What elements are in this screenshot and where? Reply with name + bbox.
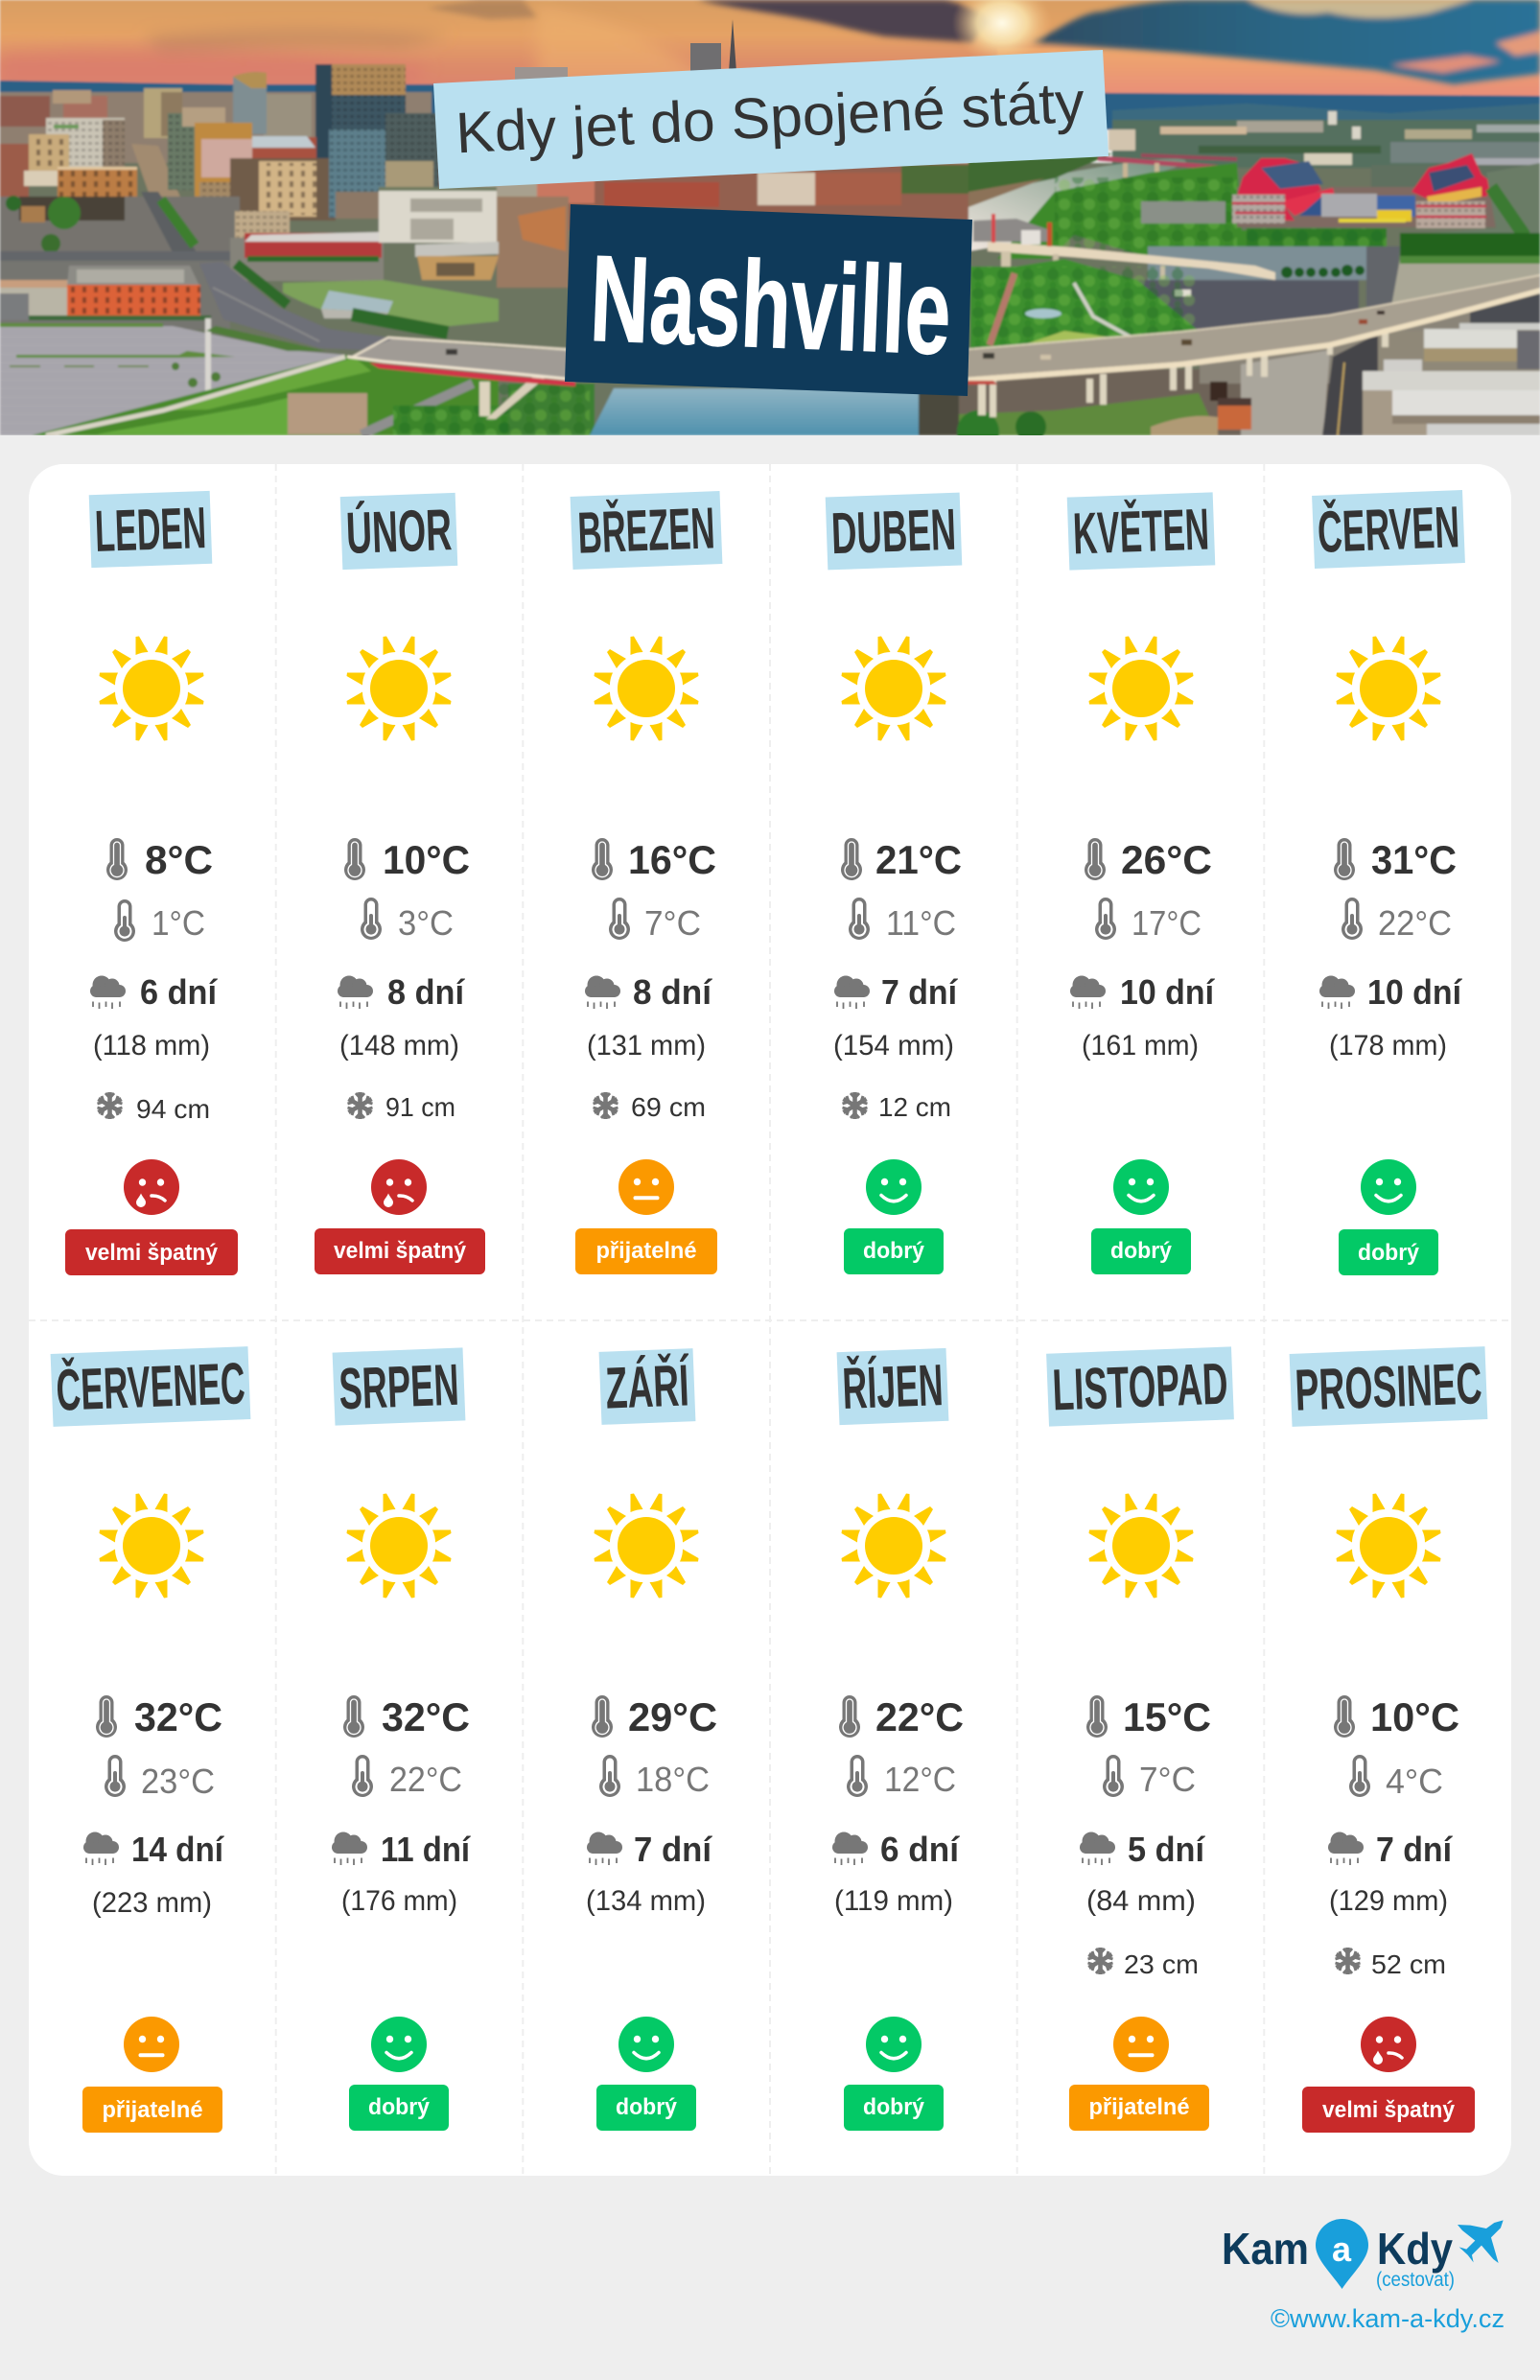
high temperature xyxy=(343,1694,470,1739)
snow xyxy=(1335,1948,1446,1979)
rain days xyxy=(1080,1830,1205,1869)
rating face xyxy=(124,1159,179,1215)
under right highway xyxy=(958,369,1329,435)
rating face xyxy=(1361,2017,1416,2072)
month heading: SRPEN xyxy=(338,1352,460,1421)
panel: ÚNOR xyxy=(315,493,485,1274)
low temperature xyxy=(1103,1755,1196,1799)
precipitation: (84 mm) xyxy=(1086,1885,1196,1917)
rating badge: velmi špatný xyxy=(334,1238,467,1264)
right highway xyxy=(978,328,1388,417)
high temperature: 21°C xyxy=(875,837,962,882)
low temperature: 11°C xyxy=(886,903,956,943)
rating badge: dobrý xyxy=(1358,1240,1420,1266)
rating badge xyxy=(575,1228,717,1274)
website credit: ©www.kam-a-kdy.cz xyxy=(1271,2304,1505,2333)
snow xyxy=(593,1092,706,1122)
month heading xyxy=(51,1346,250,1427)
lower park xyxy=(969,259,1197,348)
high temperature xyxy=(344,837,470,882)
rating badge xyxy=(596,2085,696,2131)
low temperature xyxy=(599,1755,710,1799)
rating face xyxy=(1113,1159,1169,1215)
precipitation: (119 mm) xyxy=(834,1885,953,1917)
rain days xyxy=(834,972,958,1012)
month heading: ČERVENEC xyxy=(55,1350,246,1423)
precipitation: (154 mm) xyxy=(833,1030,954,1062)
snow: 69 cm xyxy=(631,1092,706,1122)
low temperature: 17°C xyxy=(1132,903,1202,943)
panel: ŘÍJEN xyxy=(832,1348,964,2131)
month heading: ÚNOR xyxy=(345,497,453,566)
low temperature xyxy=(105,1755,215,1801)
panel: LEDEN xyxy=(65,491,238,1275)
low temperature xyxy=(1349,1755,1443,1801)
river xyxy=(508,384,595,435)
low temperature xyxy=(361,898,454,943)
icon: airplane xyxy=(1458,2220,1504,2263)
high temperature: 16°C xyxy=(628,837,716,882)
precipitation: (178 mm) xyxy=(1329,1030,1447,1062)
panel: KVĚTEN xyxy=(1067,492,1215,1274)
rating face xyxy=(866,2017,922,2072)
rain days xyxy=(1070,972,1215,1012)
precipitation: (176 mm) xyxy=(341,1885,457,1917)
low temperature: 18°C xyxy=(636,1760,710,1799)
panel: ČERVEN xyxy=(1312,490,1465,1275)
low temperature xyxy=(847,1755,956,1799)
rating face xyxy=(618,2017,674,2072)
icon: sun xyxy=(595,637,698,740)
left highway xyxy=(485,376,545,421)
low temperature xyxy=(1095,898,1202,943)
rating face xyxy=(371,1159,427,1215)
panel: ČERVENEC xyxy=(51,1346,250,2133)
panel: DUBEN xyxy=(826,493,962,1274)
snow: 12 cm xyxy=(878,1092,951,1122)
rating badge xyxy=(844,1228,944,1274)
low temperature xyxy=(114,899,205,943)
high temperature: 22°C xyxy=(875,1694,964,1739)
panel: BŘEZEN xyxy=(571,491,722,1274)
icon: sun xyxy=(1089,637,1193,740)
precipitation: (129 mm) xyxy=(1329,1885,1448,1917)
high temperature: 15°C xyxy=(1123,1694,1211,1739)
rain days xyxy=(83,1830,224,1869)
high temperature xyxy=(1334,837,1457,882)
logo: Kam a Kdy: (cestovat) xyxy=(1376,2269,1455,2291)
precipitation: (148 mm) xyxy=(339,1030,459,1062)
header photo: Nashville skyline xyxy=(0,0,1540,453)
icon: sun xyxy=(595,1494,698,1598)
low temperature: 22°C xyxy=(389,1760,462,1799)
mid streets left xyxy=(0,196,241,251)
park right upper xyxy=(997,162,1248,260)
park lawn and road xyxy=(283,280,499,331)
high temperature: 32°C xyxy=(134,1694,222,1739)
snow xyxy=(347,1092,455,1122)
icon: sun xyxy=(347,1494,451,1598)
rain days xyxy=(1319,972,1462,1012)
low temperature: 12°C xyxy=(884,1760,956,1799)
snow: 91 cm xyxy=(385,1092,455,1122)
rating badge xyxy=(1091,1228,1191,1274)
month heading xyxy=(1067,492,1215,571)
logo: Kam a Kdy: Kdy xyxy=(1377,2224,1453,2274)
low temperature: 23°C xyxy=(141,1762,215,1801)
right lower ground xyxy=(1400,233,1540,256)
month heading: ŘÍJEN xyxy=(841,1352,945,1421)
rain days xyxy=(332,1830,471,1869)
low temperature xyxy=(352,1755,462,1799)
embankment xyxy=(32,355,499,435)
high temperature xyxy=(841,837,962,882)
rain days: 11 dní xyxy=(381,1830,471,1869)
title: blue banner: Kdy jet do Spojené státy xyxy=(455,70,1085,165)
low temperature: 22°C xyxy=(1378,903,1452,943)
ground base xyxy=(0,163,1540,435)
rain days: 7 dní xyxy=(1376,1830,1453,1869)
snow xyxy=(98,1092,210,1124)
rain days xyxy=(832,1830,960,1869)
brick warehouse xyxy=(0,261,230,330)
month heading xyxy=(340,493,457,570)
panel: ZÁŘÍ xyxy=(586,1348,717,2131)
high temperature: 29°C xyxy=(628,1694,717,1739)
low temperature: 4°C xyxy=(1386,1762,1443,1801)
title: navy city banner: Nashville xyxy=(588,230,953,381)
snow: 52 cm xyxy=(1371,1949,1446,1979)
rating badge xyxy=(844,2085,944,2131)
rain days xyxy=(585,972,712,1012)
precipitation: (161 mm) xyxy=(1082,1030,1199,1062)
logo: Kam a Kdy xyxy=(1222,2219,1504,2291)
stadium xyxy=(1371,164,1528,186)
high temperature: 10°C xyxy=(383,837,470,882)
rain days: 8 dní xyxy=(633,972,712,1012)
rating face xyxy=(1361,1159,1416,1215)
low temperature: 3°C xyxy=(398,903,454,943)
icon: sun xyxy=(842,1494,945,1598)
month heading xyxy=(599,1348,695,1425)
month heading xyxy=(333,1347,465,1426)
high temperature xyxy=(839,1694,964,1739)
icon: sun xyxy=(1337,637,1440,740)
icon: map pin xyxy=(1316,2219,1368,2289)
downtown xyxy=(330,94,407,130)
icon: map pin: a xyxy=(1332,2229,1352,2269)
low temperature: 7°C xyxy=(1139,1760,1196,1799)
rating badge: přijatelné xyxy=(596,1238,696,1264)
title: navy city banner xyxy=(565,204,972,396)
month heading: ZÁŘÍ xyxy=(604,1352,691,1421)
rating badge: dobrý xyxy=(1110,1238,1173,1264)
rain days xyxy=(587,1830,712,1869)
icon: sun xyxy=(842,637,945,740)
parking lot xyxy=(0,326,345,435)
rating badge: dobrý xyxy=(616,2094,678,2120)
month heading xyxy=(1046,1346,1234,1427)
spires behind banner xyxy=(515,19,736,80)
rating badge: velmi špatný xyxy=(85,1240,219,1266)
month heading: LISTOPAD xyxy=(1051,1351,1229,1422)
month heading xyxy=(571,491,722,570)
rain days: 7 dní xyxy=(881,972,958,1012)
rain days: 8 dní xyxy=(387,972,465,1012)
rain days: 5 dní xyxy=(1128,1830,1205,1869)
rain days: 6 dní xyxy=(140,972,218,1012)
high temperature xyxy=(592,837,716,882)
hills xyxy=(0,81,1540,129)
icon: sun xyxy=(1089,1494,1193,1598)
distant city xyxy=(0,96,50,127)
high temperature xyxy=(96,1694,222,1739)
rating badge xyxy=(82,2087,222,2133)
rating badge xyxy=(1339,1229,1438,1275)
precipitation: (223 mm) xyxy=(92,1887,212,1919)
pedestrian bridge and parking xyxy=(1139,280,1360,329)
month heading xyxy=(89,491,212,568)
month heading xyxy=(826,493,962,570)
logo: Kam a Kdy: Kam xyxy=(1222,2224,1309,2274)
clouds xyxy=(697,0,1540,84)
rating badge xyxy=(1069,2085,1209,2131)
high temperature xyxy=(106,837,213,882)
rating face xyxy=(618,1159,674,1215)
rain days xyxy=(338,972,465,1012)
low temperature: 1°C xyxy=(152,903,205,943)
icon: sun xyxy=(100,637,203,740)
low temperature xyxy=(849,898,956,943)
rating badge: dobrý xyxy=(863,2094,925,2120)
low temperature xyxy=(609,898,701,943)
rating badge: dobrý xyxy=(368,2094,431,2120)
month heading: KVĚTEN xyxy=(1072,497,1210,566)
rain days: 10 dní xyxy=(1367,972,1462,1012)
high temperature: 8°C xyxy=(145,837,213,882)
low temperature: 7°C xyxy=(644,903,701,943)
snow: 23 cm xyxy=(1124,1949,1199,1979)
rating badge xyxy=(315,1228,485,1274)
snow: 94 cm xyxy=(136,1094,210,1124)
snow xyxy=(1087,1948,1199,1979)
high temperature xyxy=(1086,1694,1211,1739)
month heading: LEDEN xyxy=(94,495,207,564)
rating badge: přijatelné xyxy=(1089,2094,1189,2120)
rating face xyxy=(124,2017,179,2072)
rain days xyxy=(90,972,218,1012)
rating badge: přijatelné xyxy=(102,2097,203,2123)
snow xyxy=(842,1092,951,1122)
rating badge xyxy=(349,2085,449,2131)
high temperature: 26°C xyxy=(1121,837,1212,882)
rain days: 7 dní xyxy=(634,1830,712,1869)
rain days: 6 dní xyxy=(880,1830,960,1869)
rain days xyxy=(1328,1830,1453,1869)
icon: sun xyxy=(1337,1494,1440,1598)
panel: PROSINEC xyxy=(1290,1346,1487,2133)
rating badge xyxy=(1302,2087,1475,2133)
rain days: 14 dní xyxy=(131,1830,224,1869)
title: blue banner xyxy=(433,50,1108,189)
rain days: 10 dní xyxy=(1120,972,1215,1012)
month heading xyxy=(1312,490,1465,569)
high temperature: 31°C xyxy=(1371,837,1457,882)
rating badge: dobrý xyxy=(863,1238,925,1264)
month heading xyxy=(837,1348,948,1425)
high temperature: 10°C xyxy=(1370,1694,1459,1739)
month heading: BŘEZEN xyxy=(576,495,716,566)
rating badge: velmi špatný xyxy=(1322,2097,1456,2123)
panel: SRPEN xyxy=(332,1347,471,2131)
rating face xyxy=(866,1159,922,1215)
rating badge xyxy=(65,1229,238,1275)
precipitation: (131 mm) xyxy=(587,1030,706,1062)
icon: sun xyxy=(347,637,451,740)
precipitation: (118 mm) xyxy=(93,1030,210,1062)
rating face xyxy=(371,2017,427,2072)
low temperature xyxy=(1342,898,1452,943)
main white card xyxy=(29,464,1511,2176)
icon: sun xyxy=(100,1494,203,1598)
panel: LISTOPAD xyxy=(1046,1346,1234,2131)
precipitation: (134 mm) xyxy=(586,1885,706,1917)
rating face xyxy=(1113,2017,1169,2072)
month heading: DUBEN xyxy=(830,497,957,566)
high temperature: 32°C xyxy=(382,1694,470,1739)
